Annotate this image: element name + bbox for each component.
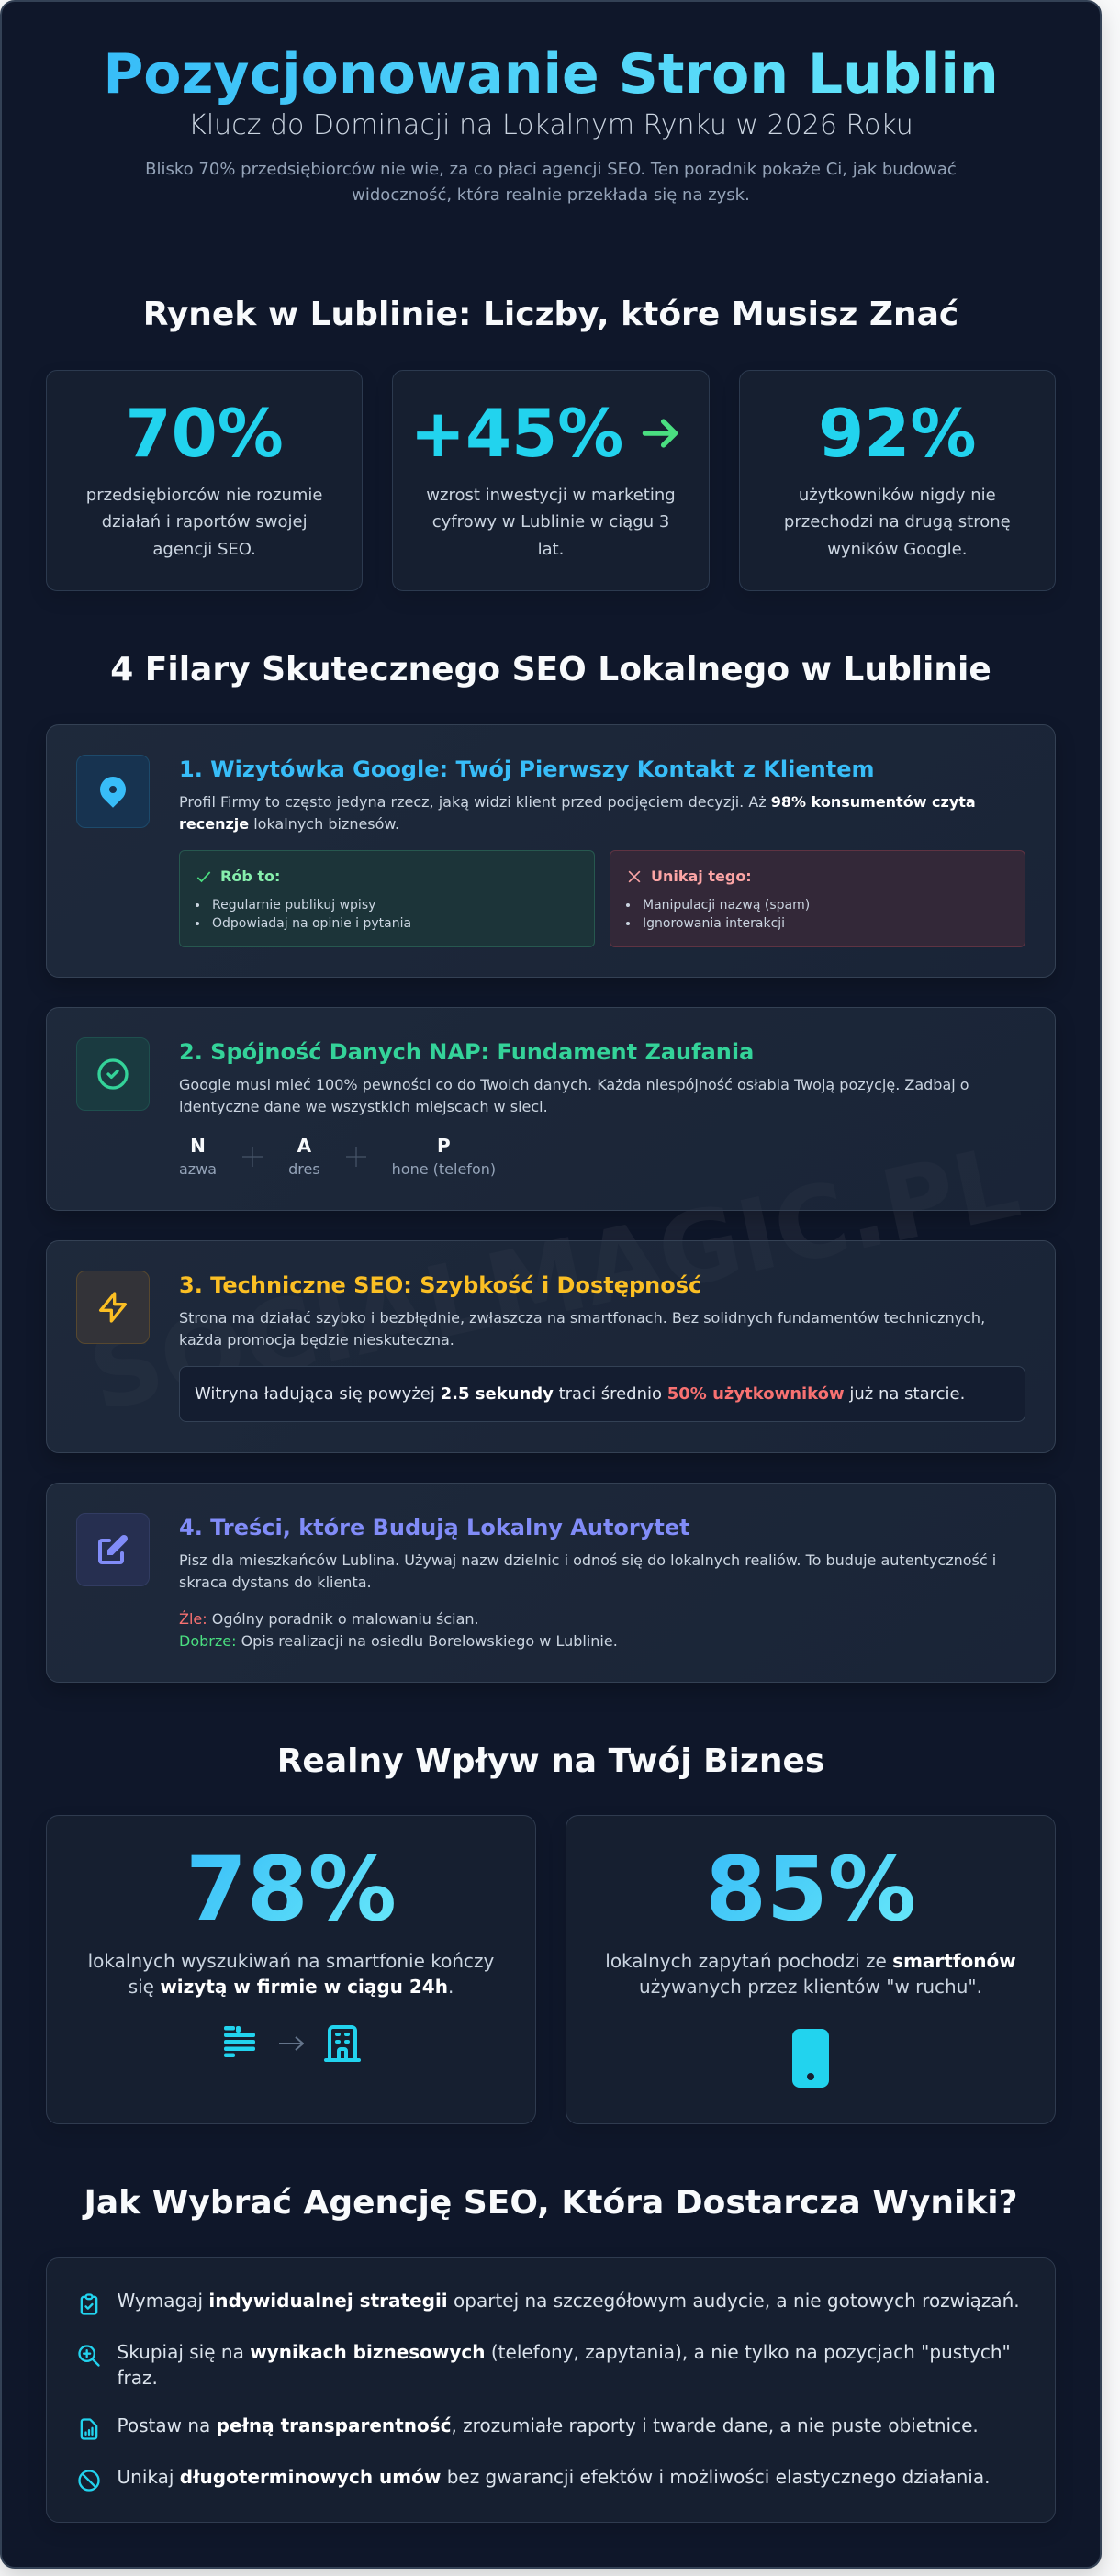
panel: pillar 1 Google Business Profile: recenzje lokalnych biznesów.: [179, 815, 399, 833]
stat card: 92%: przechodzi na drugą stronę: [784, 512, 1011, 532]
icon: lightning bolt: [76, 1271, 150, 1344]
intro paragraph: Blisko 70% przedsiębiorców nie wie, za co płaci agencji SEO. Ten poradnik pokaże Ci, jak budować: [145, 160, 957, 179]
item 2: fraz.: [118, 2367, 158, 2389]
panel: checklist: [46, 2257, 1056, 2523]
panel: pillar 4 content: Pisz dla mieszkańców Lublina. Używaj nazw dzielnic i odnoś się do lokalnych realiów. To buduje autentyczność i: [179, 1551, 996, 1569]
item 3: Postaw na pełną transparentność, zrozumiałe raporty i twarde dane, a nie puste obietnice.: [118, 2414, 979, 2436]
NAP formula: [179, 1135, 496, 1178]
icon: search results list: [224, 2026, 255, 2057]
examples: Źle: Ogólny poradnik o malowaniu ścian.: [179, 1610, 479, 1628]
NAP formula: P: [437, 1135, 451, 1157]
icon: smartphone: [792, 2029, 829, 2088]
stat card: 92%: 92%: [818, 395, 976, 472]
panel: 85% impact: lokalnych zapytań pochodzi ze smartfonów: [605, 1950, 1016, 1972]
icon: location pin: [76, 755, 150, 828]
NAP formula: N: [190, 1135, 206, 1157]
panel: pillar 2 NAP: [46, 1007, 1056, 1211]
stat card: +45%: [392, 370, 710, 591]
item 4: Unikaj długoterminowych umów bez gwarancji efektów i możliwości elastycznego działania.: [118, 2466, 990, 2488]
stat card: 70%: 70%: [125, 395, 284, 472]
panel: 78% impact: [46, 1815, 536, 2124]
panel: pillar 3 technical SEO: [46, 1240, 1056, 1453]
examples: [179, 1610, 618, 1650]
stat card: +45%: lat.: [538, 540, 564, 558]
stat card: 70%: działań i raportów swojej: [102, 512, 308, 532]
icon: zoom in: [78, 2345, 100, 2367]
heading: market: Rynek w Lublinie: Liczby, które Musisz Znać: [143, 296, 958, 333]
stat card: 70%: przedsiębiorców nie rozumie: [86, 486, 323, 505]
do box: Rób to:: [220, 868, 280, 885]
panel: 85% impact: [566, 1815, 1056, 2124]
do box: Regularnie publikuj wpisy: [212, 898, 375, 913]
stat card: 92%: użytkowników nigdy nie: [799, 486, 996, 505]
don't box: Unikaj tego:: [651, 868, 752, 885]
panel: pillar 4 content: skraca dystans do klienta.: [179, 1574, 372, 1591]
stat card: 92%: wyników Google.: [827, 540, 967, 558]
panel: pillar 1 Google Business Profile: [46, 724, 1056, 978]
icon: clipboard check: [81, 2293, 97, 2315]
item 2: [118, 2341, 1011, 2389]
icon: document chart: [81, 2418, 97, 2440]
panel: 78% impact: lokalnych wyszukiwań na smartfonie kończy: [88, 1950, 494, 1972]
NAP formula: A: [297, 1135, 311, 1157]
panel: pillar 4 content: 4. Treści, które Budują Lokalny Autorytet: [179, 1515, 690, 1540]
NAP formula: dres: [288, 1160, 320, 1178]
panel: pillar 3 technical SEO: 3. Techniczne SEO: Szybkość i Dostępność: [179, 1272, 701, 1298]
stat card: 70%: [46, 370, 363, 591]
panel: 85% impact: 85%: [705, 1838, 916, 1941]
panel: pillar 1 Google Business Profile: 1. Wizytówka Google: Twój Pierwszy Kontakt z Klientem: [179, 756, 874, 782]
item 2: Skupiaj się na wynikach biznesowych (telefony, zapytania), a nie tylko na pozycjach "pustych": [118, 2341, 1011, 2363]
do box: Odpowiadaj na opinie i pytania: [212, 916, 411, 931]
stat card: 70%: agencji SEO.: [152, 540, 256, 558]
stat card: 92%: [739, 370, 1056, 591]
heading: impact: Realny Wpływ na Twój Biznes: [277, 1742, 824, 1779]
icon: ban: [78, 2470, 100, 2492]
don't box: [610, 850, 1025, 947]
panel: 85% impact: używanych przez klientów "w ruchu".: [639, 1976, 982, 1998]
panel: 78% impact: 78%: [185, 1838, 397, 1941]
panel: pillar 3 technical SEO: Strona ma działać szybko i bezbłędnie, zwłaszcza na smartfonach. Bez solidnych fundamentów technicznych,: [179, 1309, 985, 1327]
don't box: Manipulacji nazwą (spam): [643, 898, 810, 913]
panel: pillar 4 content: [46, 1483, 1056, 1683]
heading: pillars: 4 Filary Skutecznego SEO Lokalnego w Lublinie: [110, 650, 991, 689]
icon: pencil: [76, 1513, 150, 1586]
intro paragraph: widoczność, która realnie przekłada się na zysk.: [352, 185, 750, 205]
don't box: Ignorowania interakcji: [643, 916, 785, 931]
panel: pillar 1 Google Business Profile: Profil Firmy to często jedyna rzecz, jaką widzi klient przed podjęciem decyzji. Aż 98% konsumentów czyta: [179, 793, 976, 811]
stat card: +45%: cyfrowy w Lublinie w ciągu 3: [432, 512, 669, 532]
heading: choosing an agency: Jak Wybrać Agencję SEO, Która Dostarcza Wyniki?: [84, 2183, 1018, 2222]
panel: pillar 3 technical SEO: każda promocja będzie nieskuteczna.: [179, 1331, 454, 1349]
do box: [179, 850, 595, 947]
watermark: SOCIALMAGIC.PL: [80, 1125, 1028, 1434]
panel: pillar 2 NAP: identyczne dane we wszystkich miejscach w sieci.: [179, 1098, 548, 1115]
title: Pozycjonowanie Stron Lublin: [103, 42, 999, 106]
NAP formula: hone (telefon): [392, 1160, 496, 1178]
intro paragraph: [145, 160, 957, 205]
item 1: Wymagaj indywidualnej strategii opartej na szczegółowym audycie, a nie gotowych rozwiązań.: [118, 2290, 1020, 2312]
subtitle: Klucz do Dominacji na Lokalnym Rynku w 2026 Roku: [188, 109, 913, 141]
stat card: +45%: wzrost inwestycji w marketing: [426, 486, 676, 505]
panel: 78% impact: się wizytą w firmie w ciągu 24h.: [129, 1976, 454, 1998]
stat number with arrow: +45%: [410, 395, 623, 472]
icon: office building: [324, 2025, 361, 2062]
examples: Dobrze: Opis realizacji na osiedlu Borelowskiego w Lublinie.: [179, 1632, 618, 1650]
callout: page speed: [179, 1366, 1025, 1422]
arrow: [279, 2036, 304, 2051]
panel: pillar 2 NAP: Google musi mieć 100% pewności co do Twoich danych. Każda niespójność osłabia Twoją pozycję. Zadbaj o: [179, 1076, 969, 1093]
NAP formula: azwa: [179, 1160, 217, 1178]
callout: page speed: Witryna ładująca się powyżej 2.5 sekundy traci średnio 50% użytkowników już na starcie.: [195, 1384, 965, 1404]
icon: check circle: [76, 1037, 150, 1111]
panel: pillar 2 NAP: 2. Spójność Danych NAP: Fundament Zaufania: [179, 1039, 754, 1065]
